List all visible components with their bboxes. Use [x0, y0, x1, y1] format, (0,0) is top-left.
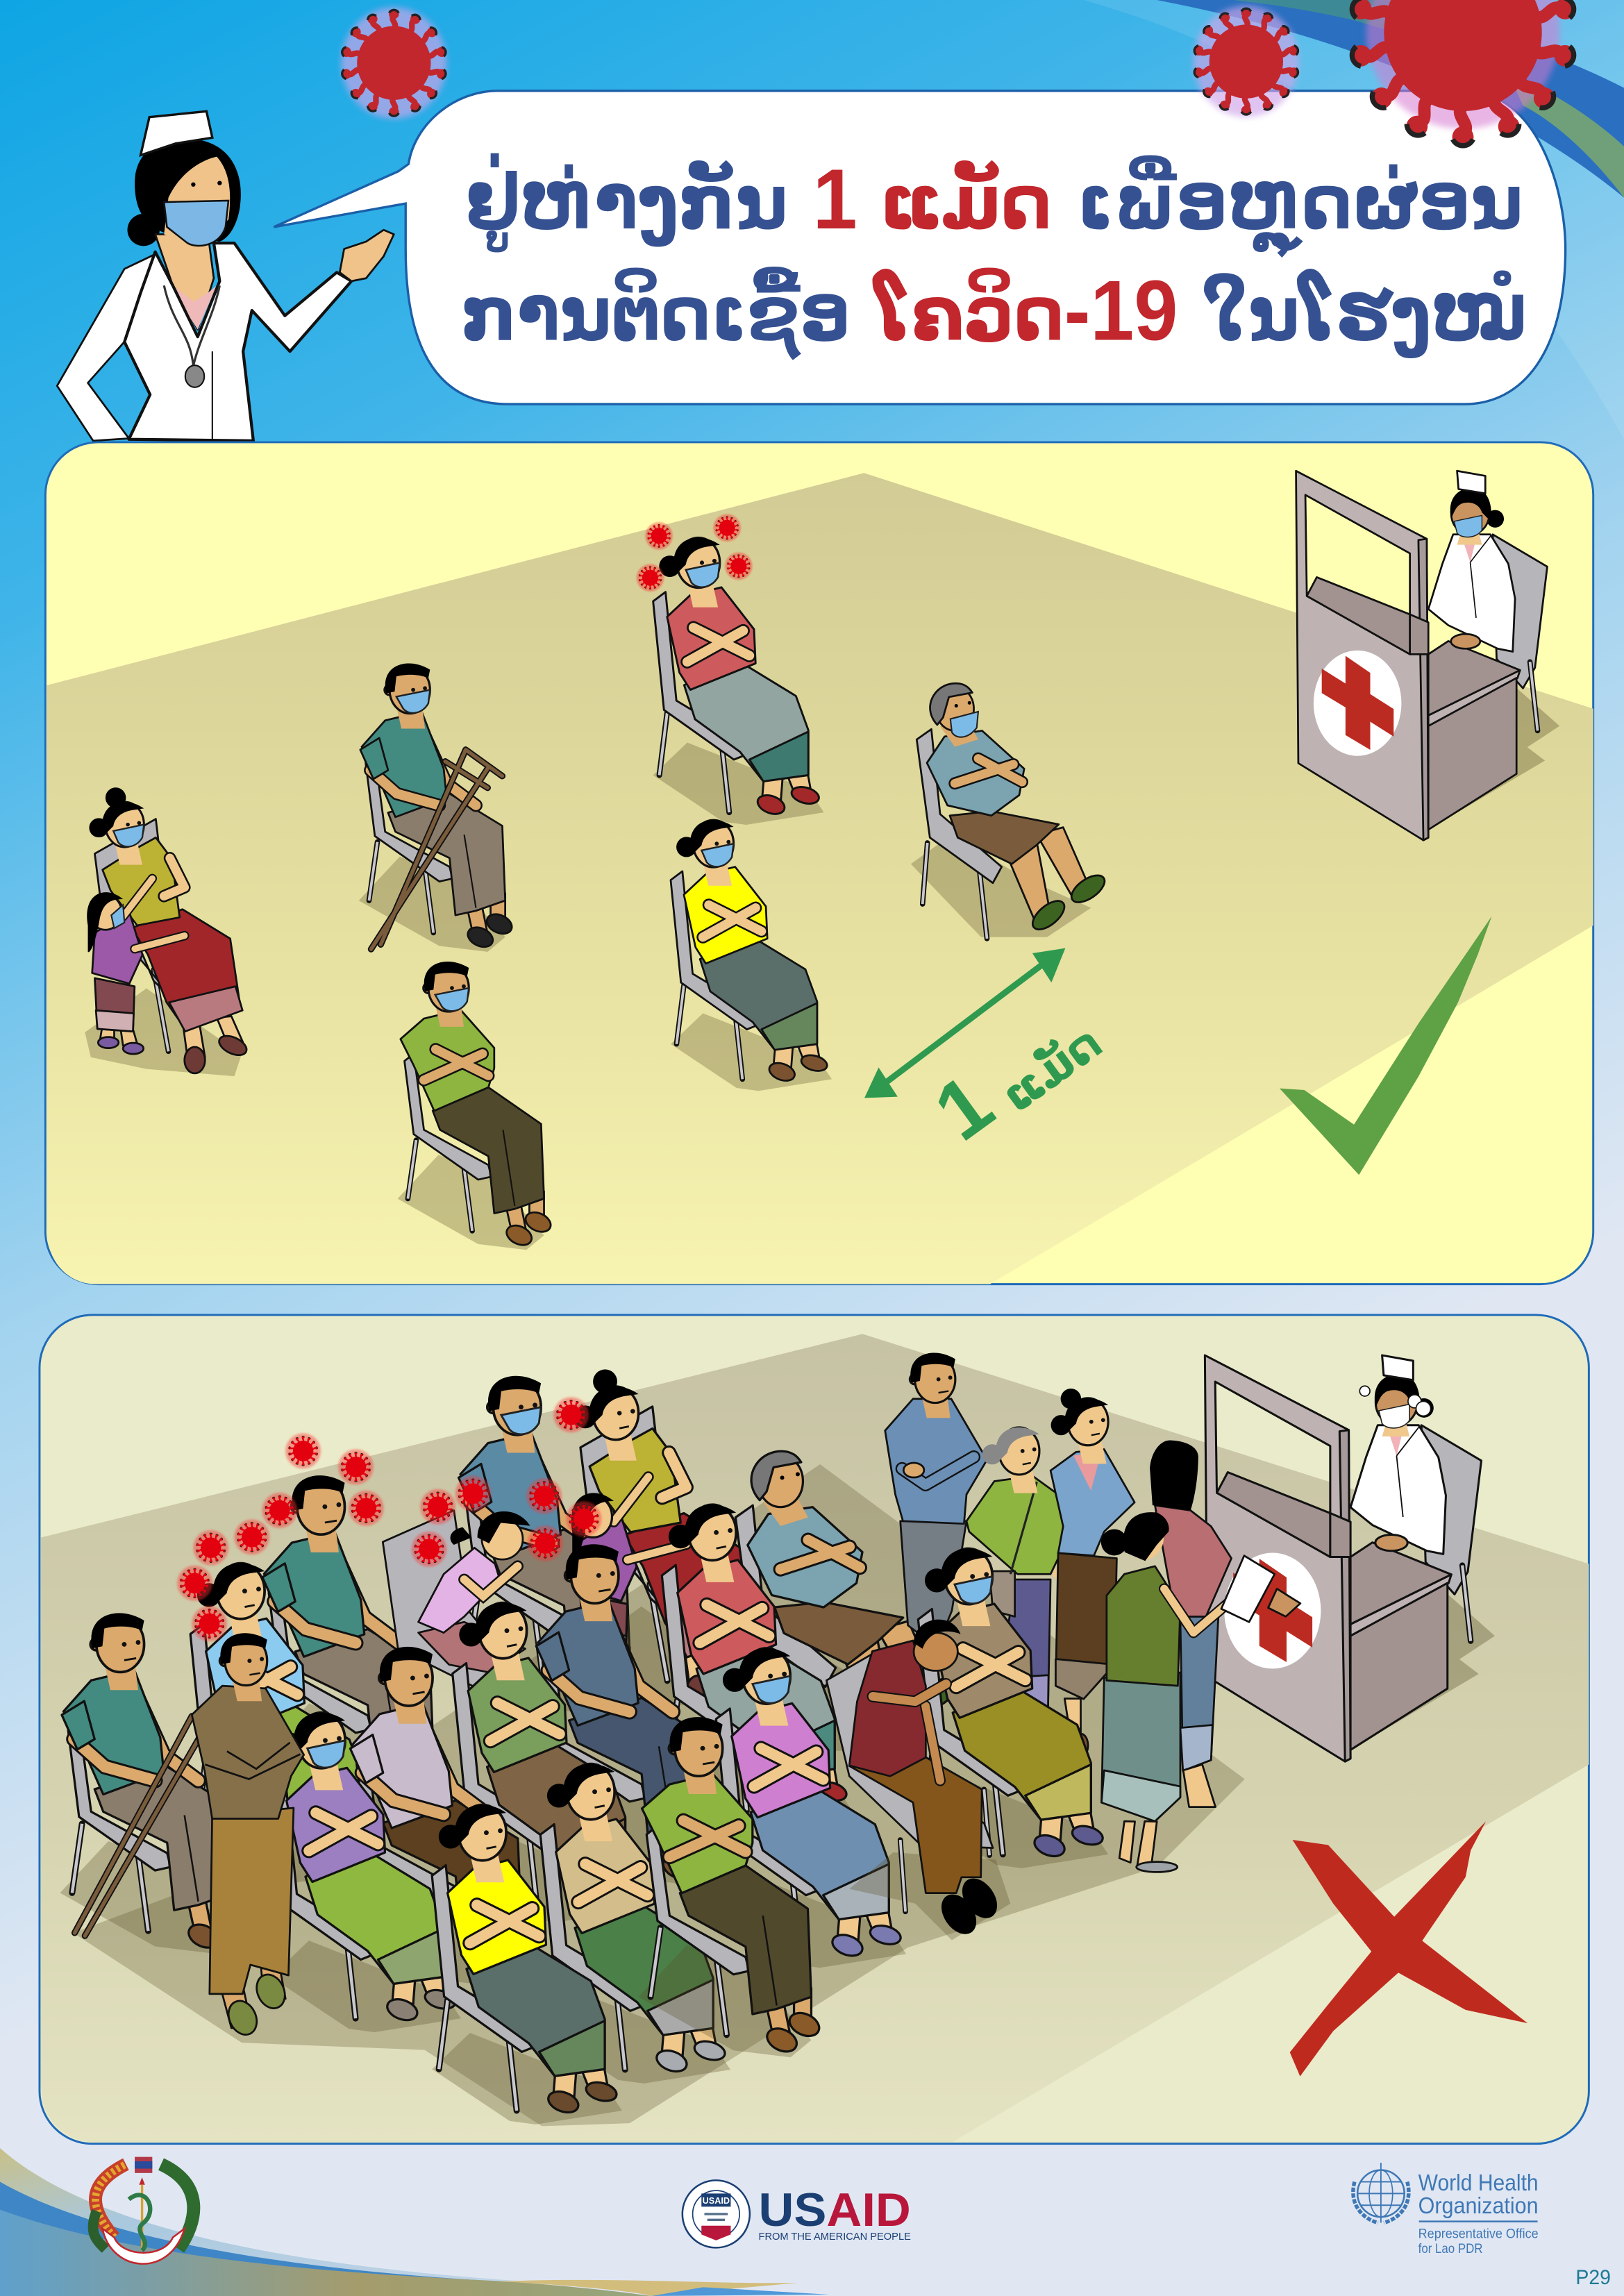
person: seated woman with mask in olive skirt — [918, 1548, 1108, 1868]
person: seated woman in purple with mask — [271, 1713, 461, 2032]
logo: World Health Organization: Representative Office — [1418, 2227, 1539, 2242]
label: 1 metre — [919, 1016, 1112, 1158]
page code: P29 — [1575, 2266, 1611, 2289]
person: man in teal shirt — [260, 1475, 445, 1816]
person: mother with child — [85, 787, 249, 1076]
person: mother with child, back row — [569, 1369, 763, 1710]
arrow: one metre — [864, 948, 1065, 1098]
person: standing grey-haired woman with bag — [966, 1427, 1076, 1707]
viruses around woman in red — [637, 514, 753, 592]
logo: Lao health ministry emblem — [93, 2157, 194, 2264]
headline line 2: ການຕິດເຊື້ອ ໂຄວິດ-19 ໃນໂຮງໝໍ — [461, 262, 1527, 360]
person: woman in green shirt handing over paper — [1101, 1512, 1233, 1872]
floor — [47, 473, 1593, 1284]
person: woman in yellow shirt — [671, 820, 832, 1091]
label: 1 metre: 1 — [919, 1057, 1010, 1158]
person: standing man in blue — [885, 1352, 987, 1648]
person: seated woman in yellow — [432, 1804, 622, 2125]
cross mark — [1290, 1821, 1527, 2077]
check mark — [1280, 916, 1492, 1175]
bottom-left swoosh — [0, 2148, 829, 2296]
person: old man in blue shirt — [911, 683, 1109, 939]
puffs of breath — [1359, 1386, 1431, 1416]
person: woman in red shirt — [662, 1505, 852, 1825]
virus: top middle — [1192, 6, 1300, 117]
floor — [41, 1334, 1589, 2143]
paper and nurse's hand — [1221, 1556, 1300, 1622]
person: seated man with mask, back row — [457, 1376, 642, 1716]
person: standing man in brown — [192, 1633, 304, 2039]
person: coughing woman in pink — [383, 1510, 530, 1699]
nurse presenter — [57, 111, 394, 441]
virus: large top right — [1348, 0, 1578, 148]
person: standing woman in blue — [1050, 1389, 1135, 1757]
virus: top left — [340, 8, 448, 119]
logo: World Health Organization — [1353, 2163, 1539, 2256]
booth with nurse — [1296, 471, 1559, 840]
person: man with crutches — [359, 664, 515, 952]
headline line 1: ຢູ່ຫ່າງກັນ 1 ແມັດ ເພື່ອຫຼຸດຜ່ອນ — [466, 151, 1523, 258]
logo: USAID: USAID — [759, 2184, 911, 2236]
person: woman in red shirt — [653, 537, 824, 825]
person: seated man in green — [639, 1717, 823, 2057]
viruses spreading through the crowd — [177, 1397, 601, 1641]
person: coughing man in red shirt — [826, 1620, 1010, 1941]
logo: World Health Organization: Organization — [1418, 2193, 1539, 2219]
person: woman with long hair seen from behind — [1150, 1440, 1232, 1807]
person: seated woman in green — [453, 1602, 642, 1922]
label: 1 metre: ແມັດ — [992, 1016, 1112, 1123]
person: old man — [728, 1451, 962, 1752]
top-right swoosh — [1084, 0, 1624, 439]
person: man in green shirt — [398, 962, 554, 1250]
booth with nurse wearing loose mask — [1205, 1355, 1495, 1761]
speech bubble — [274, 91, 1566, 404]
logo: World Health Organization: for Lao PDR — [1418, 2242, 1482, 2256]
person: seated woman in pink with mask — [716, 1648, 906, 1968]
person: seated man in lavender — [349, 1647, 533, 1987]
logo: World Health Organization: World Health — [1418, 2170, 1539, 2196]
panel: crowded waiting room — [40, 1315, 1589, 2144]
panel: correct spacing — [45, 442, 1593, 1284]
crowd shadow — [73, 1464, 1245, 2126]
person: man in dark blue shirt — [535, 1544, 719, 1884]
logo: USAID: USAID — [703, 2196, 730, 2206]
logo: USAID: FROM THE AMERICAN PEOPLE — [759, 2231, 911, 2243]
logo: USAID — [683, 2180, 911, 2247]
person: seated man with crutches — [60, 1613, 244, 1953]
person: seated woman in beige — [540, 1763, 730, 2084]
person: woman in light blue — [190, 1563, 380, 1883]
